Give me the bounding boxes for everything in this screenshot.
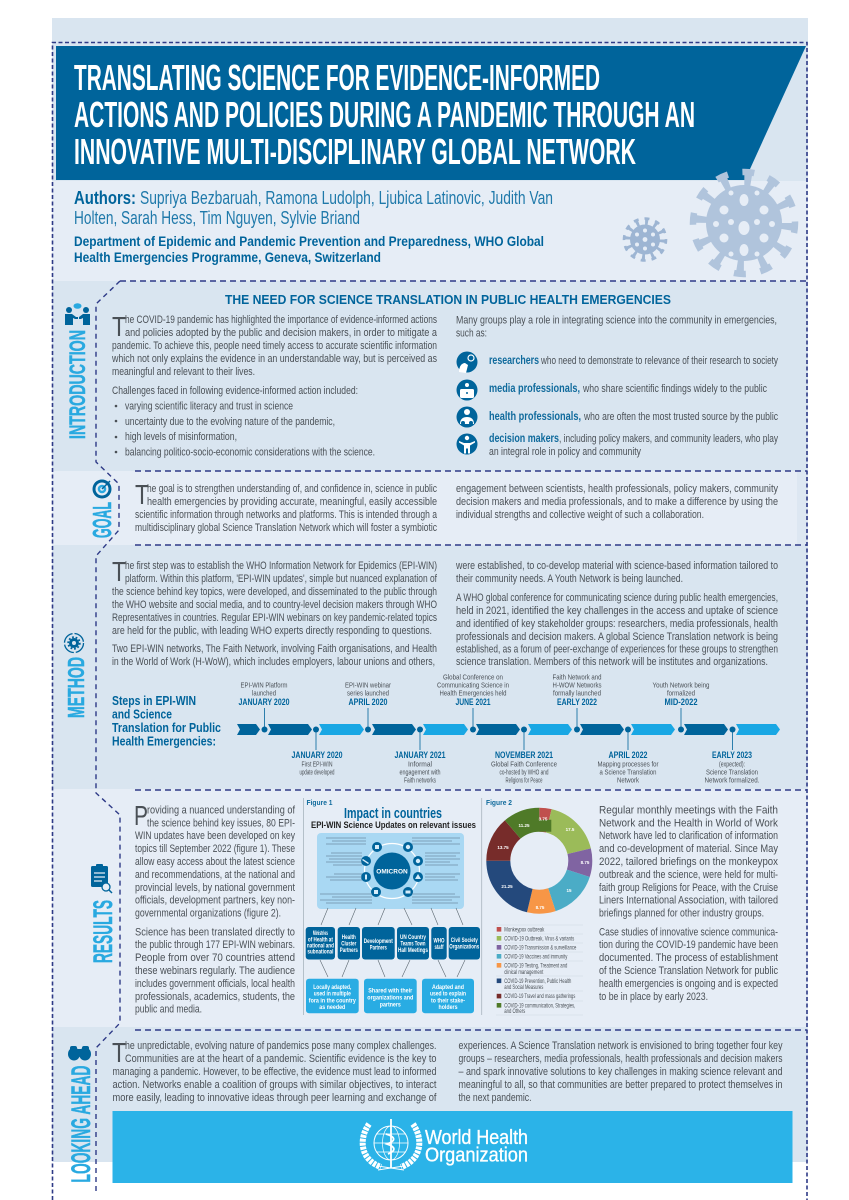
- text: media professionals: who share scientific findings widely to the public: [582, 383, 767, 395]
- milestone: June 2021: JUNE 2021: [456, 697, 490, 707]
- icon: WHO emblem: [363, 1119, 419, 1170]
- outcome boxes: partners: [380, 1002, 401, 1008]
- milestone: January 2020 update: [292, 750, 342, 776]
- milestone: November 2021: co-hosted by WHO and: [500, 768, 548, 776]
- outcome boxes: [306, 979, 474, 1013]
- text: results left column: roviding a nuanced understanding of: [147, 804, 296, 816]
- panel: looking ahead: [52, 1027, 808, 1182]
- title banner: [56, 46, 806, 180]
- milestone: June 2021: Communicating Science in: [437, 680, 509, 690]
- text: results right column: outbreak and the science, were held for multi-: [599, 869, 778, 881]
- milestone: early 2022: [552, 672, 602, 707]
- panel: goal: [52, 471, 808, 545]
- authors: [74, 188, 553, 228]
- figure 2: donut chart: 21.25: [501, 884, 513, 889]
- milestone: January 2020 platform: [238, 680, 290, 707]
- milestone: mid-2022: formalized: [667, 688, 695, 698]
- text: media professionals: [489, 383, 767, 395]
- figure 2: donut chart: 11.25: [518, 823, 530, 828]
- text: looking ahead right column: meaningful to all, so that communities are better prepared to protect themselves in: [458, 1079, 782, 1091]
- milestone: April 2022: Network: [617, 776, 639, 784]
- legend: COVID-19 Vaccines and immunity: [504, 954, 568, 960]
- text: results right column: tion during the COVID-19 pandemic have been: [599, 939, 778, 951]
- text: looking ahead left column: Communities are at the heart of a pandemic. Scientific evidence is the key to: [125, 1053, 436, 1065]
- milestone: June 2021: [437, 672, 509, 707]
- milestone: early 2023: (expected):: [719, 760, 745, 768]
- outcome boxes: to their stake-: [431, 998, 465, 1004]
- figure 2: donut chart: 8.75: [581, 860, 590, 865]
- milestone: January 2020 platform: launched: [252, 688, 276, 698]
- text: looking ahead left column: [112, 1037, 437, 1104]
- text: results right column: and co-development of material. Since May: [599, 843, 778, 855]
- text: introduction left column: [111, 311, 438, 458]
- legend: clinical management: [504, 969, 543, 976]
- outcome boxes: used to explain: [430, 990, 466, 998]
- milestone: January 2021: JANUARY 2021: [394, 750, 446, 760]
- label: introduction: INTRODUCTION: [65, 330, 90, 439]
- outcome boxes: Locally adapted,: [313, 984, 351, 991]
- header panel: [52, 18, 808, 281]
- icon: gear cycle: [64, 634, 84, 652]
- milestone: January 2020 platform: JANUARY 2020: [238, 697, 290, 707]
- text: results right column: Network have led to clarification of information: [599, 830, 778, 842]
- text: looking ahead left column: he unpredictable, evolving nature of pandemics pose many complex challenges.: [125, 1040, 436, 1052]
- milestone: mid-2022: MID-2022: [664, 697, 698, 707]
- text: looking ahead right column: – and spark innovative solutions to key challenges in making science relevant and: [458, 1066, 782, 1078]
- text: decision makers: an integral role in policy and community: [489, 446, 641, 458]
- text: goal right column: decision makers and media professionals, and to make a difference by using the: [456, 496, 778, 508]
- outcome boxes: as needed: [319, 1004, 345, 1011]
- text: introduction right column: such as:: [456, 328, 487, 340]
- stakeholder boxes: WHO: [434, 938, 445, 944]
- text: method left column: the WHO website and social media, and to country-level decision makers through WHO: [112, 599, 437, 611]
- figure 2: donut chart: 15: [566, 888, 572, 893]
- outcome boxes: holders: [438, 1004, 458, 1011]
- text: World Health Organization: Organization: [425, 1144, 528, 1166]
- text: results right column: [599, 804, 778, 1003]
- text: method left column: T: [112, 556, 126, 587]
- text: results left column: P: [134, 800, 148, 831]
- legend: COVID-19 Testing, Treatment and: [504, 962, 568, 970]
- figure 2: donut chart: 8.75: [536, 905, 545, 910]
- text: method left column: are held for the public, with leading WHO experts directly responding to questions.: [112, 625, 432, 637]
- outcome boxes: fora in the country: [309, 998, 356, 1004]
- milestone: April 2020: series launched: [347, 688, 389, 698]
- milestone: early 2023: [704, 750, 760, 784]
- milestone: early 2022: Faith Network and: [552, 672, 602, 682]
- text: method left column: the science behind key topics, were developed, and disseminated to the public through: [112, 586, 437, 598]
- text: results left column: Science has been translated directly to: [135, 926, 295, 938]
- legend: and Others: [504, 1008, 525, 1015]
- arrows: [320, 908, 465, 977]
- icon: decision makers: [456, 434, 478, 454]
- text: results left column: governmental organizations (figure 2).: [135, 908, 281, 920]
- legend: COVID-19 Travel and mass gatherings: [504, 993, 575, 1000]
- text: results left column: professionals, academics, students, the: [135, 991, 295, 1003]
- text: method right column: were established, to co-develop material with science-based information tailored to: [455, 560, 778, 572]
- text: method left column: Representatives in countries. Regular EPI-WIN webinars on key pandemic-related topics: [112, 612, 437, 624]
- stakeholder boxes: Health: [342, 935, 356, 941]
- panel: results: [52, 789, 808, 1027]
- panel: introduction: [52, 281, 808, 471]
- heading: timeline: [112, 693, 221, 748]
- text: results left column: [134, 800, 296, 1016]
- legend: COVID-19 communication, Strategies,: [504, 1002, 575, 1009]
- milestone: April 2022: [598, 750, 659, 784]
- heading: timeline: and Science: [112, 706, 172, 722]
- text: results left column: public and media.: [135, 1004, 202, 1016]
- text: health professionals: [489, 411, 778, 423]
- text: introduction left column: pandemic. To achieve this, people need timely access to accurate scientific information: [112, 340, 437, 352]
- text: introduction right column: Many groups play a role in integrating science into the community in emergencies,: [456, 314, 777, 326]
- text: health professionals: health professionals,: [489, 411, 581, 423]
- text: results left column: WIN updates have been developed on key: [135, 830, 295, 842]
- figure 2: donut chart: [486, 798, 590, 1015]
- text: looking ahead left column: managing a pandemic. However, to be effective, the evidence must lead to informed: [112, 1066, 436, 1078]
- heading: timeline: Translation for Public: [112, 720, 221, 735]
- milestone: April 2020: APRIL 2020: [348, 697, 388, 707]
- stakeholder boxes: Organizations: [449, 944, 480, 950]
- text: looking ahead right column: [458, 1040, 783, 1104]
- text: World Health Organization: World Health: [425, 1127, 528, 1149]
- label: looking ahead: LOOKING AHEAD: [66, 1066, 96, 1182]
- stakeholder boxes: UN Country: [400, 935, 427, 941]
- text: decision makers: [489, 433, 778, 458]
- text: results left column: allow easy access about the latest science: [135, 856, 295, 868]
- stakeholder boxes: Hall Meetings: [398, 948, 429, 954]
- text: results right column: to be in place by early 2023.: [599, 991, 708, 1003]
- text: decision makers: , including policy makers, and community leaders, who play: [559, 433, 778, 445]
- text: decision makers: decision makers: [489, 433, 559, 445]
- text: looking ahead right column: the next pandemic.: [458, 1092, 532, 1104]
- stakeholder boxes: of Health at: [308, 938, 333, 944]
- icon: researchers: [456, 352, 478, 373]
- figure 2: donut chart: 13.75: [497, 845, 509, 850]
- milestone: November 2021: Global Faith Conference: [491, 760, 557, 768]
- text: results left column: officials, development partners, key non-: [135, 894, 295, 906]
- text: results right column: briefings planned for other industry groups.: [599, 908, 764, 920]
- milestone: early 2022: EARLY 2022: [557, 697, 597, 707]
- figure 1: impact in countries: EPI-WIN Science Updates on relevant issues: [311, 820, 476, 830]
- text: results right column: 2022, tailored briefings on the monkeypox: [599, 856, 778, 868]
- affiliation: [74, 234, 544, 265]
- text: introduction left column: and policies adopted by the public and decision makers, in order to mitigate a: [125, 327, 438, 339]
- label: method: METHOD: [63, 657, 89, 718]
- text: results left column: People from over 70 countries attend: [135, 952, 295, 964]
- text: introduction left column: which not only explains the evidence in an understandable way, but is perceived as: [111, 353, 437, 365]
- authors: Supriya Bezbaruah, Ramona Ludolph, Ljubica Latinovic, Judith Van: [140, 188, 553, 208]
- figure 1: impact in countries: [304, 798, 482, 1015]
- text: results right column: documented. The process of establishment: [599, 952, 778, 964]
- heading: timeline: Health Emergencies:: [112, 734, 216, 748]
- omicron diagram: [317, 833, 464, 909]
- text: looking ahead left column: more easily, leading to innovative ideas through peer learning and exchange of: [112, 1092, 437, 1104]
- figure 1: impact in countries: Figure 1: [306, 798, 332, 807]
- milestone: January 2021: [394, 750, 446, 784]
- milestone: January 2020 platform: EPI-WIN Platform: [240, 680, 288, 690]
- text: goal left column: [135, 479, 438, 534]
- text: introduction left column: balancing politico-socio-economic considerations with the science.: [125, 446, 375, 458]
- text: method right column: their community needs. A Youth Network is being launched.: [456, 573, 683, 585]
- text: goal right column: individual strengths and collective weight of such a collaboration.: [456, 509, 704, 521]
- milestone: June 2021: Health Emergencies held: [440, 688, 506, 698]
- stakeholder boxes: Ministries: [313, 931, 328, 937]
- text: introduction right column: [456, 314, 777, 340]
- text: method left column: [112, 556, 438, 668]
- text: introduction left column: varying scientific literacy and trust in science: [125, 400, 293, 412]
- text: goal left column: T: [135, 479, 149, 510]
- heading: need for science translation: THE NEED FOR SCIENCE TRANSLATION IN PUBLIC HEALTH EMERGENCIES: [225, 292, 671, 307]
- band: World Health Organization: [112, 1111, 792, 1183]
- text: results left column: topics till September 2022 (figure 1). These: [135, 843, 295, 855]
- stakeholder boxes: Civil Society: [451, 938, 478, 944]
- text: method right column: [455, 560, 778, 668]
- stakeholder boxes: national and: [307, 944, 334, 950]
- milestone: January 2021: engagement with: [400, 768, 440, 776]
- stakeholder boxes: Development: [364, 939, 393, 945]
- text: results left column: includes government officials, local health: [135, 978, 295, 990]
- milestone: November 2021: Religions for Peace: [506, 776, 543, 784]
- text: method left column: he first step was to establish the WHO Information Network for Epidemics (EPI-WIN): [125, 560, 437, 572]
- milestone: January 2020 update: First EPI-WIN: [302, 760, 332, 768]
- milestone: April 2022: Mapping processes for: [598, 760, 659, 768]
- milestone: January 2021: Informal: [408, 760, 432, 768]
- icon: target: [92, 480, 112, 498]
- figure 1: impact in countries: Impact in countries: [344, 806, 442, 822]
- figure 2: donut chart: Figure 2: [486, 798, 512, 807]
- icon: large virus: [693, 172, 795, 274]
- outcome boxes: organizations and: [367, 994, 413, 1002]
- text: results left column: the science behind key issues, 80 EPI-: [147, 818, 295, 830]
- text: introduction left column: high levels of misinformation,: [125, 431, 237, 443]
- text: introduction left column: meaningful and relevant to their lives.: [112, 366, 255, 378]
- text: goal left column: multidisciplinary global Science Translation Network which will foster a symbiotic: [135, 522, 437, 534]
- figure 2: donut chart: 3.75: [539, 816, 548, 822]
- icon: clipboard with magnifier: [91, 864, 112, 893]
- text: method right column: science translation. Members of this network will be institutes and organizations.: [456, 656, 768, 668]
- text: results left column: provincial levels, by national government: [135, 882, 295, 894]
- outcome boxes: used in multiple: [314, 990, 351, 998]
- text: media professionals: media professionals,: [489, 383, 580, 395]
- text: goal left column: he goal is to strengthen understanding of, and confidence in, science in public: [147, 483, 437, 495]
- stakeholder boxes: Partners: [340, 948, 358, 954]
- stakeholder boxes: Partners: [370, 946, 387, 952]
- text: method right column: professionals and decision makers. A global Science Translation network is being: [456, 631, 778, 643]
- text: introduction left column: Challenges faced in following evidence-informed action included:: [112, 385, 358, 397]
- icon: binoculars: [68, 1046, 91, 1060]
- text: goal right column: [456, 483, 778, 521]
- icon: people talking: [65, 303, 90, 325]
- milestone: January 2021: Faith networks: [404, 776, 436, 784]
- text: results left column: the public through 177 EPI-WIN webinars.: [135, 939, 295, 951]
- milestone: mid-2022: [652, 680, 710, 707]
- icon: health professionals: [456, 406, 478, 428]
- label: results: RESULTS: [88, 900, 118, 963]
- stakeholder boxes: staff: [434, 945, 444, 951]
- text: results left column: and recommendations, at the national and: [135, 869, 295, 881]
- stakeholder boxes: Teams Town: [400, 942, 426, 948]
- stakeholder boxes: [306, 927, 480, 960]
- milestone: April 2020: [345, 680, 391, 707]
- milestone: early 2023: EARLY 2023: [712, 750, 752, 760]
- milestone: April 2022: APRIL 2022: [608, 750, 648, 760]
- affiliation: Department of Epidemic and Pandemic Prevention and Preparedness, WHO Global: [74, 234, 544, 249]
- outcome boxes: Adapted and: [432, 984, 464, 991]
- authors: Holten, Sarah Hess, Tim Nguyen, Sylvie Briand: [74, 208, 360, 228]
- text: results right column: Case studies of innovative science communica-: [599, 926, 778, 938]
- text: introduction left column: T: [112, 311, 126, 342]
- milestone: June 2021: Global Conference on: [443, 672, 503, 682]
- text: looking ahead left column: action. Networks enable a coalition of groups with similar objectives, to interact: [112, 1079, 436, 1091]
- legend: [496, 925, 583, 1015]
- milestone: January 2020 update: JANUARY 2020: [292, 750, 342, 760]
- text: method left column: Two EPI-WIN networks, The Faith Network, involving Faith organisations, and Health: [112, 643, 437, 655]
- text: health professionals: who are often the most trusted source by the public: [583, 411, 778, 423]
- timeline chart: [237, 672, 780, 784]
- figure 2: donut chart: 17.5: [566, 827, 575, 832]
- legend: COVID-19 Prevention, Public Health: [504, 978, 572, 985]
- stakeholder boxes: Cluster: [341, 942, 357, 948]
- omicron diagram: OMICRON: [376, 868, 408, 876]
- milestone: early 2022: H-WOW Networks: [552, 680, 602, 690]
- text: researchers: [489, 355, 778, 367]
- milestone: April 2020: EPI-WIN webinar: [345, 680, 391, 690]
- text: World Health Organization: [425, 1127, 528, 1166]
- milestone: January 2020 update: update developed: [300, 768, 334, 776]
- text: goal right column: engagement between scientists, health professionals, policy makers, community: [456, 483, 778, 495]
- text: introduction left column: he COVID-19 pandemic has highlighted the importance of evidence-informed actions: [125, 314, 437, 326]
- stakeholder boxes: subnational: [307, 950, 334, 956]
- text: results right column: health emergencies is ongoing and is expected: [599, 978, 778, 990]
- panel: method: [52, 545, 808, 789]
- milestone: early 2022: formally launched: [553, 688, 601, 698]
- text: method right column: held in 2021, identified the key challenges in the access and uptake of science: [456, 605, 778, 617]
- milestone: November 2021: NOVEMBER 2021: [495, 750, 553, 760]
- text: results left column: these webinars regularly. The audience: [135, 965, 295, 977]
- icon: media professionals: [456, 380, 478, 400]
- milestone: early 2023: Network formalized.: [704, 776, 760, 784]
- text: results right column: faith group Religions for Peace, with the Cruise: [599, 882, 778, 894]
- legend: and Social Measures: [504, 984, 543, 991]
- milestone: early 2023: Science Translation: [706, 768, 758, 776]
- legend: Monkeypox outbreak: [504, 926, 545, 934]
- heading: timeline: Steps in EPI-WIN: [112, 693, 196, 708]
- text: method left column: platform. Within this platform, 'EPI-WIN updates', simple but nuanced explanation of: [125, 573, 438, 585]
- text: introduction left column: uncertainty due to the evolving nature of the pandemic,: [125, 416, 335, 428]
- authors: Authors:: [74, 188, 136, 208]
- text: looking ahead left column: T: [112, 1037, 126, 1068]
- text: results right column: of the Science Translation Network for public: [599, 965, 778, 977]
- legend: COVID-19 Outbreak, Virus & variants: [504, 936, 574, 942]
- text: goal left column: health emergencies by providing accurate, meaningful, easily accessible: [147, 496, 437, 508]
- affiliation: Health Emergencies Programme, Geneva, Switzerland: [74, 250, 381, 265]
- legend: COVID-19 Transmission & surveillance: [504, 944, 577, 952]
- text: results right column: Network and the Health in World of Work: [599, 818, 778, 830]
- milestone: April 2022: a Science Translation: [600, 768, 656, 776]
- text: results right column: Regular monthly meetings with the Faith: [599, 804, 778, 816]
- text: results right column: Liners International Association, with tailored: [599, 894, 778, 906]
- icon: small virus: [624, 218, 666, 260]
- text: method right column: and identified of key stakeholder groups: researchers, media professionals, health: [456, 618, 778, 630]
- milestone: mid-2022: Youth Network being: [652, 680, 710, 690]
- panel: goal: GOAL: [87, 502, 117, 538]
- text: method left column: in the World of Work (H-WoW), which includes employers, labour unions and others,: [112, 656, 435, 668]
- title: [74, 57, 695, 172]
- outcome boxes: Shared with their: [368, 988, 413, 994]
- text: goal left column: scientific information through networks and platforms. This is intended through a: [135, 509, 438, 521]
- milestone: November 2021: [491, 750, 557, 784]
- text: researchers: researchers: [489, 355, 539, 367]
